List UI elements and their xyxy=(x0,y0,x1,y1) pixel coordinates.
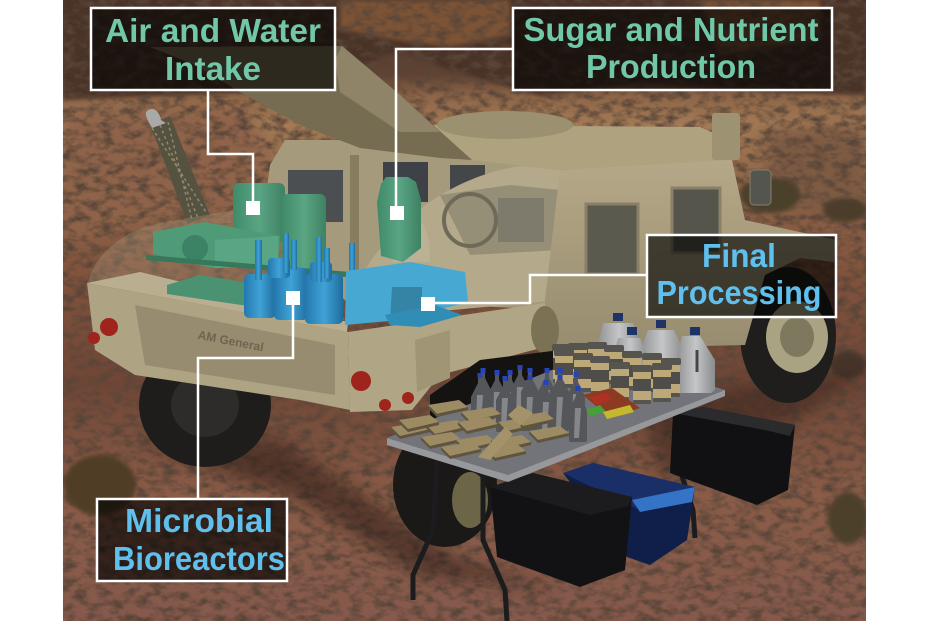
rear wheel left xyxy=(139,343,271,467)
seat xyxy=(392,215,430,262)
translucent canopy dome xyxy=(88,205,345,320)
ration packets xyxy=(391,400,569,461)
colourful snack bars xyxy=(583,388,640,419)
black storage bin front xyxy=(490,473,632,587)
green fermenter bottle xyxy=(377,177,421,262)
callout: Air and Water Intake: Air and Water xyxy=(105,12,321,49)
nutrient cups xyxy=(552,342,681,404)
rear tire under table xyxy=(393,423,497,547)
callout: Air and Water Intake xyxy=(91,8,335,215)
callout: Final Processing xyxy=(421,235,836,317)
callout: Microbial Bioreactors: Microbial xyxy=(125,502,273,539)
roof hatch xyxy=(437,111,573,139)
green plate xyxy=(167,275,250,306)
folding table xyxy=(387,313,795,621)
windshield and dashboard xyxy=(345,166,560,320)
callout: Microbial Bioreactors: Bioreactors xyxy=(113,540,285,577)
doors and right cab side xyxy=(540,113,836,350)
callout: Sugar and Nutrient Production xyxy=(390,8,832,220)
blue processing tank xyxy=(345,262,468,327)
green air and water components xyxy=(146,177,421,306)
tailgate lettering: AM General xyxy=(197,328,265,354)
front wheel xyxy=(740,267,836,403)
table legs xyxy=(413,405,695,621)
roof xyxy=(430,125,732,170)
drink bottles xyxy=(471,365,587,442)
callout: Air and Water Intake: Intake xyxy=(165,50,261,87)
cab body xyxy=(262,140,560,320)
callout: Sugar and Nutrient Production: Sugar and Nutrient xyxy=(524,11,818,48)
callout: Microbial Bioreactors xyxy=(97,291,300,581)
callout: Final Processing: Processing xyxy=(656,274,822,311)
water jugs xyxy=(597,313,715,393)
humvee vehicle xyxy=(87,46,836,547)
callout: Sugar and Nutrient Production: Production xyxy=(586,48,756,85)
blue bioreactors xyxy=(244,233,355,324)
rear bed tailgate xyxy=(87,272,560,440)
green compressor xyxy=(146,222,350,277)
black storage bin rear xyxy=(670,407,795,505)
green tanks xyxy=(233,183,326,270)
blue storage bin xyxy=(563,463,695,565)
callout: Final Processing: Final xyxy=(702,237,776,274)
raised hood xyxy=(150,46,472,160)
table top xyxy=(387,350,725,482)
air intake snorkel xyxy=(146,109,210,224)
